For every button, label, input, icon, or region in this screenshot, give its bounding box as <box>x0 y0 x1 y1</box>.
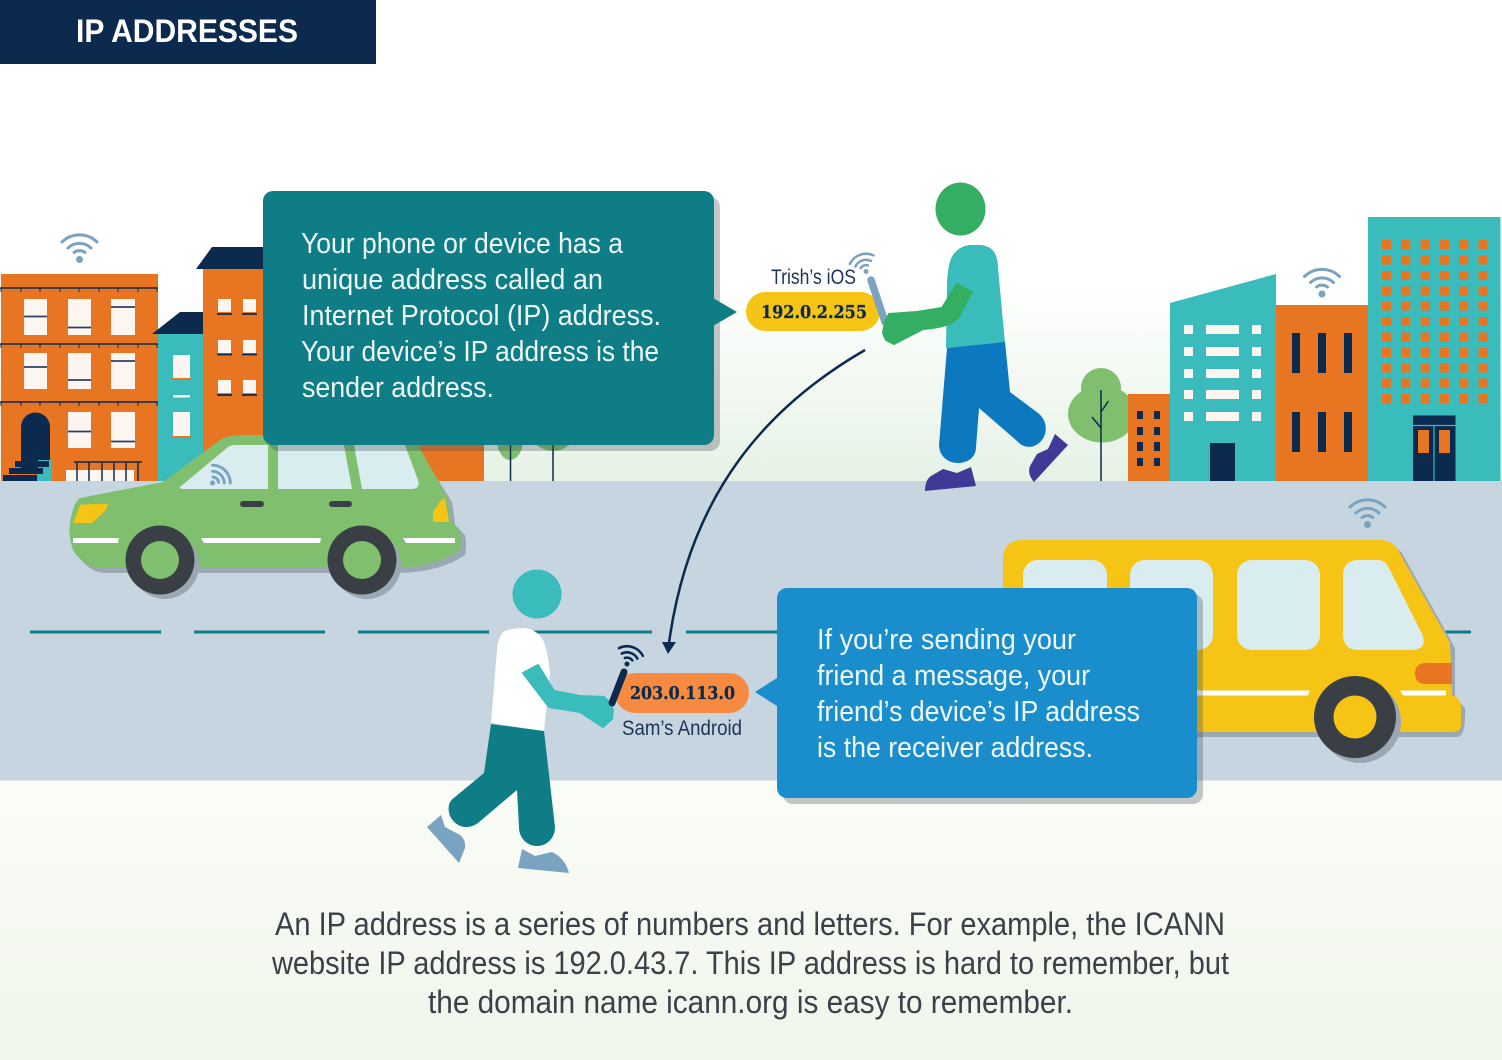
icon: wifi over brick building <box>62 235 97 263</box>
road <box>0 481 1502 780</box>
callout: receiver address: If you’re sending your <box>817 624 1076 656</box>
callout: sender address: Your phone or device has a <box>301 228 624 260</box>
icon: wifi on Sam's phone <box>614 643 644 670</box>
teal slanted building <box>1170 274 1276 481</box>
caption <box>271 906 1229 1020</box>
teal tower <box>1368 217 1500 481</box>
car <box>69 435 466 599</box>
callout: sender address: Your device’s IP address is the <box>301 336 659 368</box>
callout: receiver address <box>755 588 1203 804</box>
label: Trish's iOS: Trish’s iOS <box>771 266 856 289</box>
right tree <box>1068 368 1136 481</box>
IP pill: 203.0.113.0: 203.0.113.0 <box>630 683 735 704</box>
callout: sender address: sender address. <box>302 372 494 404</box>
person: Trish walking <box>848 182 1068 491</box>
caption: An IP address is a series of numbers and letters. For example, the ICANN <box>275 906 1225 942</box>
icon: wifi in car window <box>202 462 234 494</box>
label: Sam's Android: Sam’s Android <box>622 717 742 740</box>
icon: wifi over right building <box>1304 269 1340 298</box>
background building and trees behind callout <box>400 409 576 481</box>
IP pill: 192.0.2.255: 192.0.2.255 <box>761 302 867 323</box>
bus wheel <box>1314 676 1401 763</box>
person: Sam walking <box>427 570 644 873</box>
title banner <box>0 0 376 64</box>
callout: sender address: Internet Protocol (IP) address. <box>302 300 661 332</box>
left brick building <box>0 274 158 481</box>
arrow: from sender to receiver <box>662 350 865 654</box>
caption: website IP address is 192.0.43.7. This IP address is hard to remember, but <box>271 945 1229 981</box>
caption: the domain name icann.org is easy to remember. <box>428 984 1073 1020</box>
car wheels <box>126 526 401 599</box>
bus <box>1003 540 1465 763</box>
callout: receiver address: friend’s device’s IP address <box>817 696 1140 728</box>
teal narrow building <box>152 312 204 481</box>
orange building right <box>1276 305 1368 481</box>
callout: receiver address: friend a message, your <box>817 660 1090 692</box>
IP pill: 192.0.2.255 <box>746 292 880 331</box>
icon: wifi over bus <box>1350 500 1385 528</box>
callout: sender address: unique address called an <box>302 264 603 296</box>
orange tall building <box>196 247 273 481</box>
IP pill: 203.0.113.0 <box>615 673 749 713</box>
icon: wifi on Trish's phone <box>848 251 879 278</box>
small orange building <box>1128 394 1170 481</box>
callout: receiver address: is the receiver address. <box>817 732 1093 764</box>
title banner: IP ADDRESSES <box>76 13 298 49</box>
callout: sender address <box>263 191 737 451</box>
